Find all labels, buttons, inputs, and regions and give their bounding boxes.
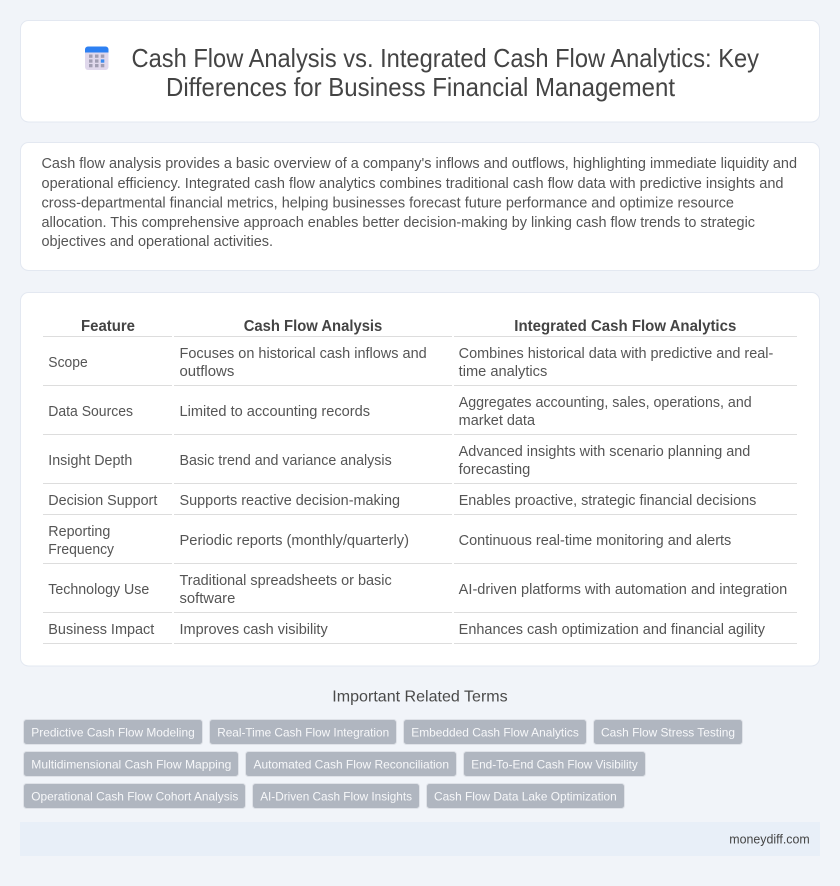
table row: insight depth: Basic trend and variance analysis bbox=[180, 453, 392, 469]
table row: scope: Focuses on historical cash inflows and bbox=[180, 346, 427, 362]
table row: reporting frequency bbox=[43, 524, 797, 564]
title: Cash Flow Analysis vs. Integrated Cash Flow Analytics: Key bbox=[132, 45, 759, 73]
tag: Cash Flow Data Lake Optimization bbox=[434, 790, 617, 804]
table row: scope bbox=[43, 346, 797, 386]
table row: scope: outflows bbox=[180, 364, 234, 380]
table row: data sources: market data bbox=[459, 413, 535, 429]
tag: AI-Driven Cash Flow Insights bbox=[260, 790, 412, 804]
table row: decision support: Decision Support bbox=[48, 493, 157, 509]
tag bbox=[24, 720, 202, 744]
table row: data sources: Limited to accounting records bbox=[180, 404, 370, 420]
table row: data sources: Aggregates accounting, sales, operations, and bbox=[459, 395, 752, 411]
tag bbox=[404, 720, 586, 744]
tag: Multidimensional Cash Flow Mapping bbox=[31, 758, 231, 772]
table row: reporting frequency: Continuous real-time monitoring and alerts bbox=[459, 533, 731, 549]
table row: data sources: Data Sources bbox=[48, 404, 133, 420]
tag: Embedded Cash Flow Analytics bbox=[411, 726, 579, 740]
tag bbox=[210, 720, 396, 744]
table header row: Cash Flow Analysis bbox=[244, 318, 382, 335]
heading: important related terms: Important Related Terms bbox=[332, 689, 508, 706]
table row: business impact bbox=[43, 622, 797, 644]
table header row: Integrated Cash Flow Analytics bbox=[514, 318, 736, 335]
tag bbox=[594, 720, 742, 744]
title: Differences for Business Financial Management bbox=[166, 74, 675, 102]
panel: comparison table bbox=[20, 292, 820, 666]
table row: technology use bbox=[43, 573, 797, 613]
table row: insight depth: Advanced insights with scenario planning and bbox=[459, 444, 750, 460]
table row: insight depth: forecasting bbox=[459, 462, 530, 478]
tag bbox=[464, 752, 646, 776]
text block: summary paragraph: cross-departmental financial metrics, helping businesses forecast future performance and optimize resource bbox=[42, 196, 734, 212]
tag: Predictive Cash Flow Modeling bbox=[31, 726, 195, 740]
table row: scope: Combines historical data with predictive and real- bbox=[459, 346, 774, 362]
panel: introduction text bbox=[20, 142, 820, 270]
table row: decision support bbox=[43, 493, 797, 515]
text block: summary paragraph: operational efficiency. Integrated cash flow analytics combines traditional cash flow data with predictive insights and bbox=[42, 176, 784, 192]
table row: technology use: AI-driven platforms with automation and integration bbox=[459, 582, 787, 598]
table row: data sources bbox=[43, 395, 797, 435]
tag bbox=[252, 784, 420, 808]
tag bbox=[246, 752, 456, 776]
table header row: Feature bbox=[81, 318, 135, 335]
text block: summary paragraph: Cash flow analysis provides a basic overview of a company's inflows and outflows, highlighting immediate liquidity and bbox=[42, 156, 797, 172]
table row: reporting frequency: Periodic reports (monthly/quarterly) bbox=[180, 533, 409, 549]
panel: related term tags bbox=[24, 720, 742, 808]
footer credit: moneydiff.com bbox=[729, 831, 810, 846]
tag: Automated Cash Flow Reconciliation bbox=[254, 758, 449, 772]
table header row bbox=[43, 318, 797, 337]
tag: Real-Time Cash Flow Integration bbox=[217, 726, 389, 740]
table row: business impact: Business Impact bbox=[48, 622, 154, 638]
table row: insight depth: Insight Depth bbox=[48, 453, 132, 469]
text block: summary paragraph: objectives and operational activities. bbox=[42, 234, 273, 250]
tag bbox=[426, 784, 624, 808]
table row: technology use: software bbox=[180, 591, 235, 607]
table row: scope: Scope bbox=[48, 355, 88, 371]
table row: decision support: Supports reactive decision-making bbox=[180, 493, 400, 509]
icon: calendar bbox=[85, 46, 108, 70]
table row: decision support: Enables proactive, strategic financial decisions bbox=[459, 493, 756, 509]
title bbox=[132, 45, 759, 102]
tag: End-To-End Cash Flow Visibility bbox=[471, 758, 638, 772]
tag bbox=[24, 784, 246, 808]
table row: reporting frequency: Reporting bbox=[48, 524, 110, 540]
table row: technology use: Traditional spreadsheets or basic bbox=[180, 573, 392, 589]
table row: business impact: Enhances cash optimization and financial agility bbox=[459, 622, 766, 638]
table row: technology use: Technology Use bbox=[48, 582, 149, 598]
table row: insight depth bbox=[43, 444, 797, 484]
table row: scope: time analytics bbox=[459, 364, 547, 380]
tag: Cash Flow Stress Testing bbox=[601, 726, 735, 740]
tag: Operational Cash Flow Cohort Analysis bbox=[31, 790, 238, 804]
text block: summary paragraph: allocation. This comprehensive approach enables better decision-making by linking cash flow trends to strategic bbox=[42, 215, 755, 231]
text block: summary paragraph bbox=[42, 156, 797, 250]
tag bbox=[24, 752, 238, 776]
footer bar bbox=[20, 822, 820, 856]
panel: title header bbox=[20, 20, 820, 122]
table row: business impact: Improves cash visibility bbox=[180, 622, 328, 638]
table row: reporting frequency: Frequency bbox=[48, 542, 115, 558]
